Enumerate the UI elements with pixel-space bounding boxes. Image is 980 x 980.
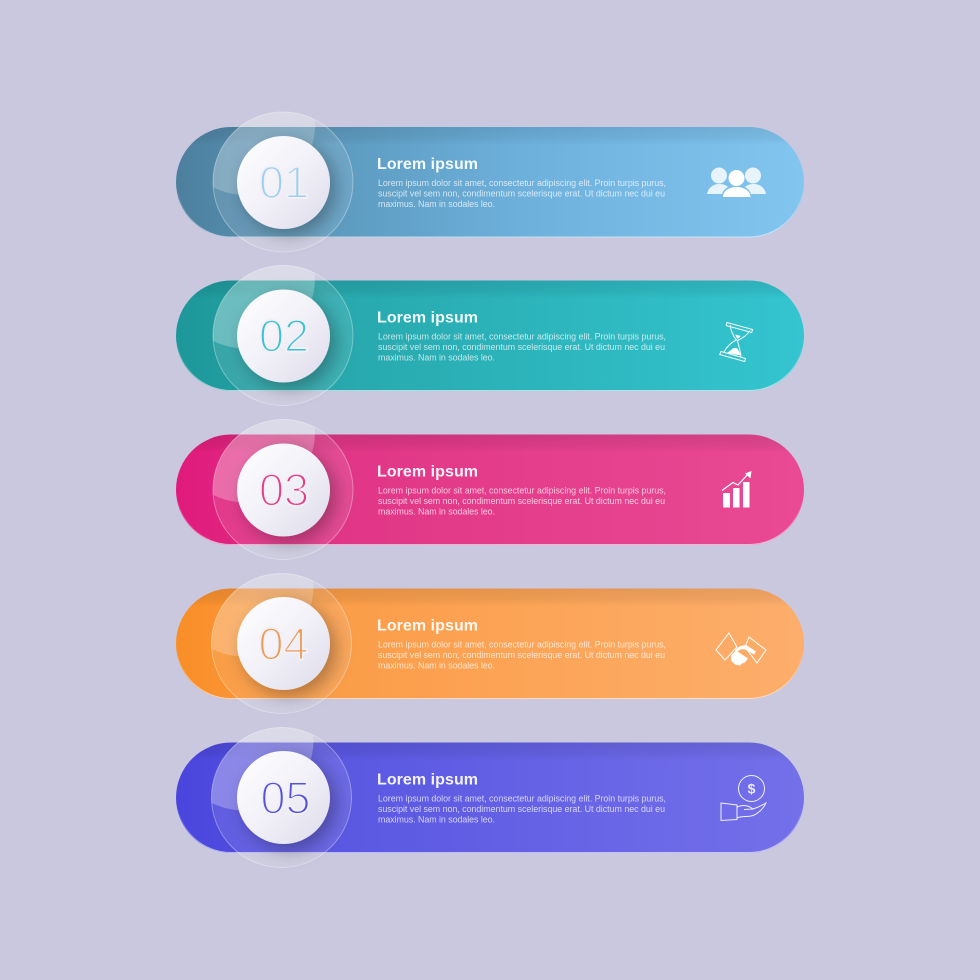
number disc 05 [237, 751, 330, 844]
body text 02: Lorem ipsum dolor sit amet, consectetur adipiscing elit. Proin turpis purus, [378, 331, 666, 341]
body text 05: Lorem ipsum dolor sit amet, consectetur adipiscing elit. Proin turpis purus, [378, 793, 666, 803]
panel: row 02 [176, 265, 804, 406]
icon: coin in hand: $ [748, 780, 756, 796]
bar 05 [176, 742, 804, 853]
heading 02: Lorem ipsum [377, 310, 478, 326]
icon: hourglass [720, 322, 752, 362]
number disc 02: 02 [259, 310, 309, 362]
number disc 01: 01 [259, 157, 309, 208]
body text 03 [378, 485, 666, 516]
heading 04: Lorem ipsum [377, 618, 478, 634]
body text 05: suscipit vel sem non, condimentum scelerisque erat. Ut dictum nec dui eu [378, 804, 665, 814]
body text 04: Lorem ipsum dolor sit amet, consectetur adipiscing elit. Proin turpis purus, [378, 639, 666, 649]
body text 01: maximus. Nam in sodales leo. [378, 199, 495, 209]
number disc 04 [237, 597, 330, 690]
panel: row 01 [176, 112, 804, 252]
body text 01 [378, 178, 666, 209]
bar 04 [176, 588, 804, 699]
icon: handshake [716, 633, 766, 666]
glass circle 04 [211, 573, 352, 714]
body text 02 [378, 331, 666, 362]
body text 05: maximus. Nam in sodales leo. [378, 814, 495, 824]
glass circle 05 [211, 727, 352, 868]
glass circle 03 [212, 419, 354, 560]
icon: growth chart [722, 471, 752, 508]
icon: people [707, 168, 766, 197]
panel: row 03 [176, 419, 804, 560]
body text 02: suscipit vel sem non, condimentum scelerisque erat. Ut dictum nec dui eu [378, 342, 665, 352]
bar 01 [176, 127, 804, 238]
number disc 03: 03 [259, 464, 309, 516]
heading 01: Lorem ipsum [377, 156, 478, 173]
heading 03: Lorem ipsum [377, 464, 478, 480]
body text 04 [378, 639, 666, 670]
glass circle 02 [212, 265, 354, 406]
number disc 03 [237, 444, 330, 536]
panel: row 05 [176, 727, 804, 868]
panel: row 04 [176, 573, 804, 714]
body text 01: Lorem ipsum dolor sit amet, consectetur adipiscing elit. Proin turpis purus, [378, 178, 666, 188]
body text 03: Lorem ipsum dolor sit amet, consectetur adipiscing elit. Proin turpis purus, [378, 485, 666, 495]
body text 04: maximus. Nam in sodales leo. [378, 660, 495, 670]
number disc 04: 04 [258, 618, 309, 670]
bar 03 [176, 434, 804, 545]
body text 05 [378, 793, 666, 824]
glass circle 01 [212, 112, 354, 252]
heading 05: Lorem ipsum [377, 772, 478, 788]
number disc 02 [237, 290, 330, 382]
body text 03: maximus. Nam in sodales leo. [378, 506, 495, 516]
body text 04: suscipit vel sem non, condimentum scelerisque erat. Ut dictum nec dui eu [378, 650, 665, 660]
body text 01: suscipit vel sem non, condimentum scelerisque erat. Ut dictum nec dui eu [378, 189, 665, 199]
body text 02: maximus. Nam in sodales leo. [378, 352, 495, 362]
body text 03: suscipit vel sem non, condimentum scelerisque erat. Ut dictum nec dui eu [378, 496, 665, 506]
number disc 01 [237, 136, 330, 229]
icon: coin in hand [721, 776, 766, 820]
bar 02 [176, 280, 804, 391]
number disc 05: 05 [260, 772, 311, 824]
